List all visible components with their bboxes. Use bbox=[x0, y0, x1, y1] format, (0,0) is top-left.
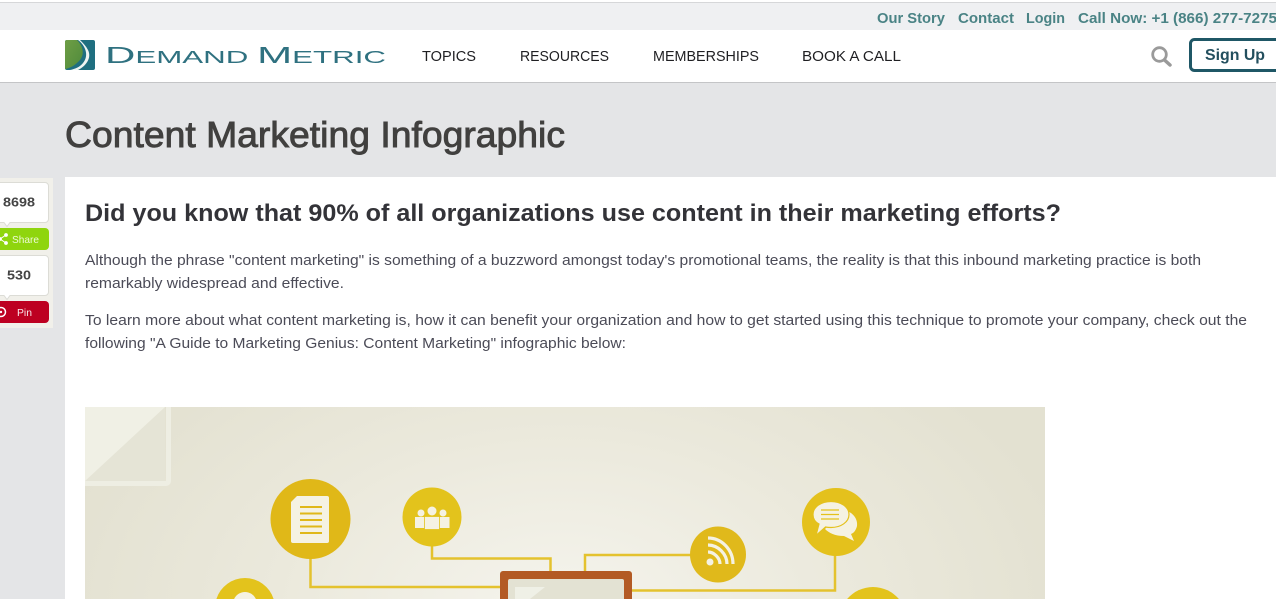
sign up button: Sign Up bbox=[1205, 47, 1265, 64]
top utility bar bbox=[0, 2, 1276, 30]
top link: Contact: Contact bbox=[958, 11, 1014, 27]
icon: people bbox=[402, 488, 462, 546]
icon: partial circle right bbox=[847, 587, 899, 599]
share button: Share bbox=[12, 234, 39, 246]
pin button bbox=[0, 301, 49, 323]
share count box bbox=[0, 182, 48, 226]
heading: Did you know that 90% of all organizations use content in their marketing efforts? bbox=[85, 200, 1061, 227]
sign up button bbox=[1190, 40, 1276, 70]
icon: chat bubbles bbox=[802, 488, 870, 556]
main content panel bbox=[65, 177, 1276, 599]
share button bbox=[0, 228, 49, 250]
infographic image bbox=[85, 407, 1045, 599]
logo: Demand Metric bbox=[65, 40, 386, 70]
navigation bar bbox=[0, 30, 1276, 83]
page title: Content Marketing Infographic bbox=[65, 114, 565, 155]
pin count box bbox=[0, 256, 48, 300]
icon: logo mark bbox=[65, 40, 95, 70]
share count box: 8698 bbox=[3, 194, 35, 210]
logo wordmark: D EMAND M ETRIC bbox=[105, 42, 386, 68]
second paragraph: following "A Guide to Marketing Genius: Content Marketing" infographic below: bbox=[85, 335, 626, 352]
icon: share bbox=[0, 234, 7, 244]
social share sidebar bbox=[0, 178, 53, 328]
top link: Login: Login bbox=[1026, 11, 1065, 27]
second paragraph bbox=[85, 312, 1247, 352]
nav item: Book a call: BOOK A CALL bbox=[802, 49, 901, 65]
monitor bbox=[500, 571, 632, 599]
nav item: Resources: RESOURCES bbox=[520, 49, 609, 65]
pin count box: 530 bbox=[7, 268, 31, 282]
connector lines bbox=[310, 544, 835, 590]
icon: RSS feed bbox=[690, 526, 746, 582]
top link: Our Story: Our Story bbox=[877, 11, 945, 27]
intro paragraph bbox=[85, 252, 1201, 292]
top link: phone number: Call Now: +1 (866) 277-7275 bbox=[1078, 11, 1276, 27]
intro paragraph: remarkably widespread and effective. bbox=[85, 275, 344, 292]
icon: person circle bbox=[216, 578, 274, 599]
icon: pinterest bbox=[0, 308, 6, 316]
nav item: Memberships: MEMBERSHIPS bbox=[653, 49, 759, 65]
icon: search bbox=[1153, 48, 1170, 65]
icon: document bbox=[270, 479, 350, 559]
intro paragraph: Although the phrase "content marketing" is something of a buzzword amongst today's promotional teams, the reality is that this inbound marketing practice is both bbox=[85, 252, 1201, 269]
nav item: Topics: TOPICS bbox=[422, 49, 476, 65]
second paragraph: To learn more about what content marketing is, how it can benefit your organization and how to get started using this technique to promote your company, check out the bbox=[85, 312, 1247, 329]
pin button: Pin bbox=[17, 307, 32, 319]
folded page corner bbox=[85, 407, 168, 484]
